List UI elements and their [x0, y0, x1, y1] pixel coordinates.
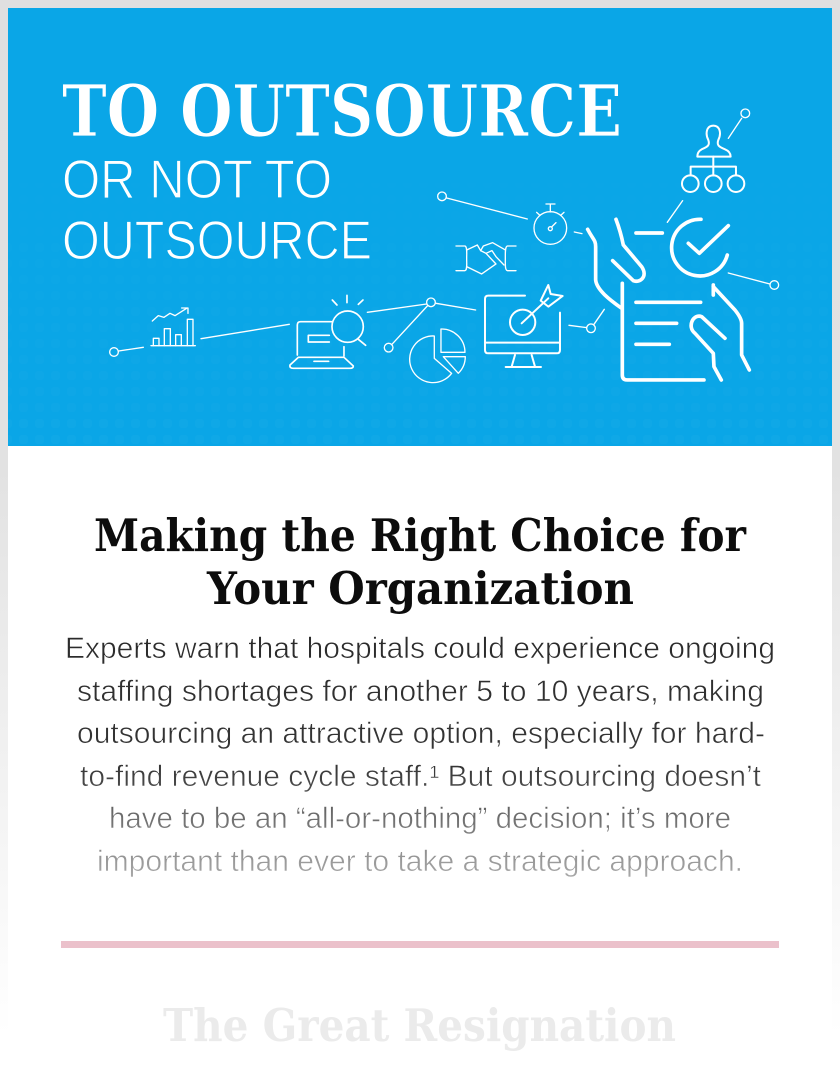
intro paragraph: important than ever to take a strategic approach. [97, 845, 743, 878]
icon: checklist held in hands [588, 219, 749, 380]
intro paragraph: to-find revenue cycle staff.¹ But outsourcing doesn’t [80, 760, 762, 793]
connectors: left side [110, 298, 476, 356]
heading: Your Organization [206, 562, 634, 615]
title: TO OUTSOURCE [62, 69, 622, 153]
intro paragraph: outsourcing an attractive option, especially for hard- [77, 717, 765, 750]
title [62, 69, 622, 271]
intro paragraph: Experts warn that hospitals could experience ongoing [65, 632, 775, 665]
divider rule [61, 941, 779, 948]
icon: growth bar chart [151, 308, 195, 346]
icon: monitor with target [485, 285, 563, 367]
intro paragraph: have to be an “all-or-nothing” decision; it’s more [109, 802, 731, 835]
connectors: right side [438, 109, 779, 333]
heading [94, 509, 747, 615]
icon: organisation chart [682, 126, 744, 192]
header panel [8, 8, 832, 446]
title: OR NOT TO [62, 148, 332, 210]
title: OUTSOURCE [62, 209, 372, 271]
intro paragraph: staffing shortages for another 5 to 10 years, making [77, 675, 764, 708]
icon: handshake [456, 243, 516, 274]
intro paragraph [65, 632, 775, 878]
section heading: The Great Resignation: The Great Resignation [163, 999, 676, 1052]
heading: Making the Right Choice for [94, 509, 747, 562]
icon: stopwatch [534, 204, 567, 244]
icon: laptop with magnifier [290, 295, 366, 368]
icon: pie chart [410, 329, 465, 383]
